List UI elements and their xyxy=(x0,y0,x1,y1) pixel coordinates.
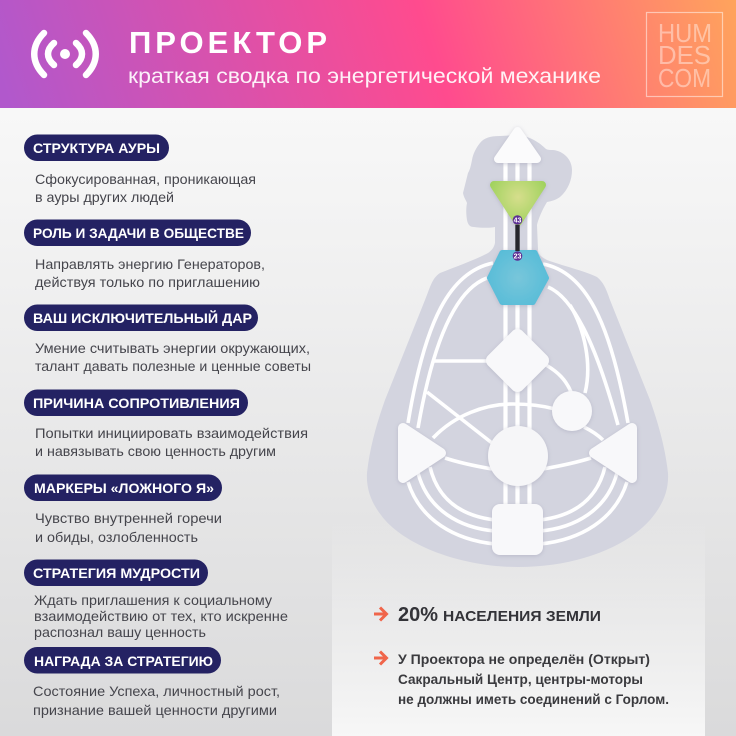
active channel 43-23 xyxy=(515,225,520,251)
block: strategy: распознал вашу ценность xyxy=(34,624,206,640)
note text: Сакральный Центр, центры-моторы xyxy=(398,671,643,687)
block: false self: Чувство внутренней горечи xyxy=(35,510,222,526)
logo: HUM xyxy=(658,18,712,48)
silhouette xyxy=(367,135,668,567)
gate 23 xyxy=(513,251,522,261)
population stat: 20% xyxy=(398,604,438,626)
block: reward: Состояние Успеха, личностный рост, xyxy=(33,683,280,699)
logo: COM xyxy=(658,63,711,93)
subtitle: краткая сводка по энергетической механике xyxy=(128,65,601,88)
centre: sacral xyxy=(488,426,548,486)
gate 23: 23 xyxy=(514,254,521,260)
block: role: РОЛЬ И ЗАДАЧИ В ОБЩЕСТВЕ xyxy=(33,225,244,241)
bodygraph xyxy=(367,131,668,567)
block: reward: НАГРАДА ЗА СТРАТЕГИЮ xyxy=(34,653,213,669)
centre: throat xyxy=(490,252,546,302)
block: gift: талант давать полезные и ценные советы xyxy=(35,358,311,374)
icon: projector signal xyxy=(34,33,96,75)
centre: ajna xyxy=(494,185,542,222)
block: role xyxy=(24,220,265,290)
block: role: действуя только по приглашению xyxy=(35,274,260,290)
centre: spleen xyxy=(552,391,592,431)
block: gift: ВАШ ИСКЛЮЧИТЕЛЬНЫЙ ДАР xyxy=(33,309,252,326)
note text: У Проектора не определён (Открыт) xyxy=(398,651,650,667)
logo xyxy=(646,12,722,96)
block: aura: в ауры других людей xyxy=(35,189,174,205)
channels xyxy=(408,160,628,544)
centre: head xyxy=(498,131,537,159)
centre: g xyxy=(493,336,542,385)
block: strategy: взаимодействию от тех, кто искренне xyxy=(34,608,288,624)
centre: root xyxy=(492,504,543,555)
block: strategy: СТРАТЕГИЯ МУДРОСТИ xyxy=(33,565,200,581)
block: strategy: Ждать приглашения к социальному xyxy=(34,592,272,608)
logo: DES xyxy=(658,40,711,70)
population stat xyxy=(398,604,601,626)
block: resistance: ПРИЧИНА СОПРОТИВЛЕНИЯ xyxy=(33,395,240,411)
population stat: НАСЕЛЕНИЯ ЗЕМЛИ xyxy=(443,608,601,625)
centre: left triangle xyxy=(403,428,441,478)
block: aura: Сфокусированная, проникающая xyxy=(35,171,256,187)
block: reward: признание вашей ценности другими xyxy=(33,702,277,718)
centre: right triangle xyxy=(594,428,632,478)
gate 43: 43 xyxy=(514,218,521,224)
icon: arrow 2 xyxy=(374,652,386,664)
block: gift xyxy=(24,304,311,374)
note text xyxy=(398,651,669,707)
block: aura: СТРУКТУРА АУРЫ xyxy=(33,140,160,156)
block: role: Направлять энергию Генераторов, xyxy=(35,256,265,272)
block: strategy xyxy=(24,560,288,640)
block: resistance xyxy=(24,390,308,459)
title: ПРОЕКТОР xyxy=(129,25,327,60)
block: reward xyxy=(24,647,280,718)
block: false self: МАРКЕРЫ «ЛОЖНОГО Я» xyxy=(34,480,214,496)
block: gift: Умение считывать энергии окружающих, xyxy=(35,340,310,356)
block: resistance: Попытки инициировать взаимодействия xyxy=(35,425,308,441)
panel: lower right xyxy=(332,520,705,736)
block: resistance: и навязывать свою ценность другим xyxy=(35,443,276,459)
icon: arrow 1 xyxy=(374,608,386,620)
header banner xyxy=(0,0,736,108)
block: false self: и обиды, озлобленность xyxy=(35,529,198,545)
block: aura xyxy=(24,134,256,205)
note text: не должны иметь соединений с Горлом. xyxy=(398,691,669,707)
block: false self xyxy=(24,474,222,545)
gate 43 xyxy=(513,215,522,225)
